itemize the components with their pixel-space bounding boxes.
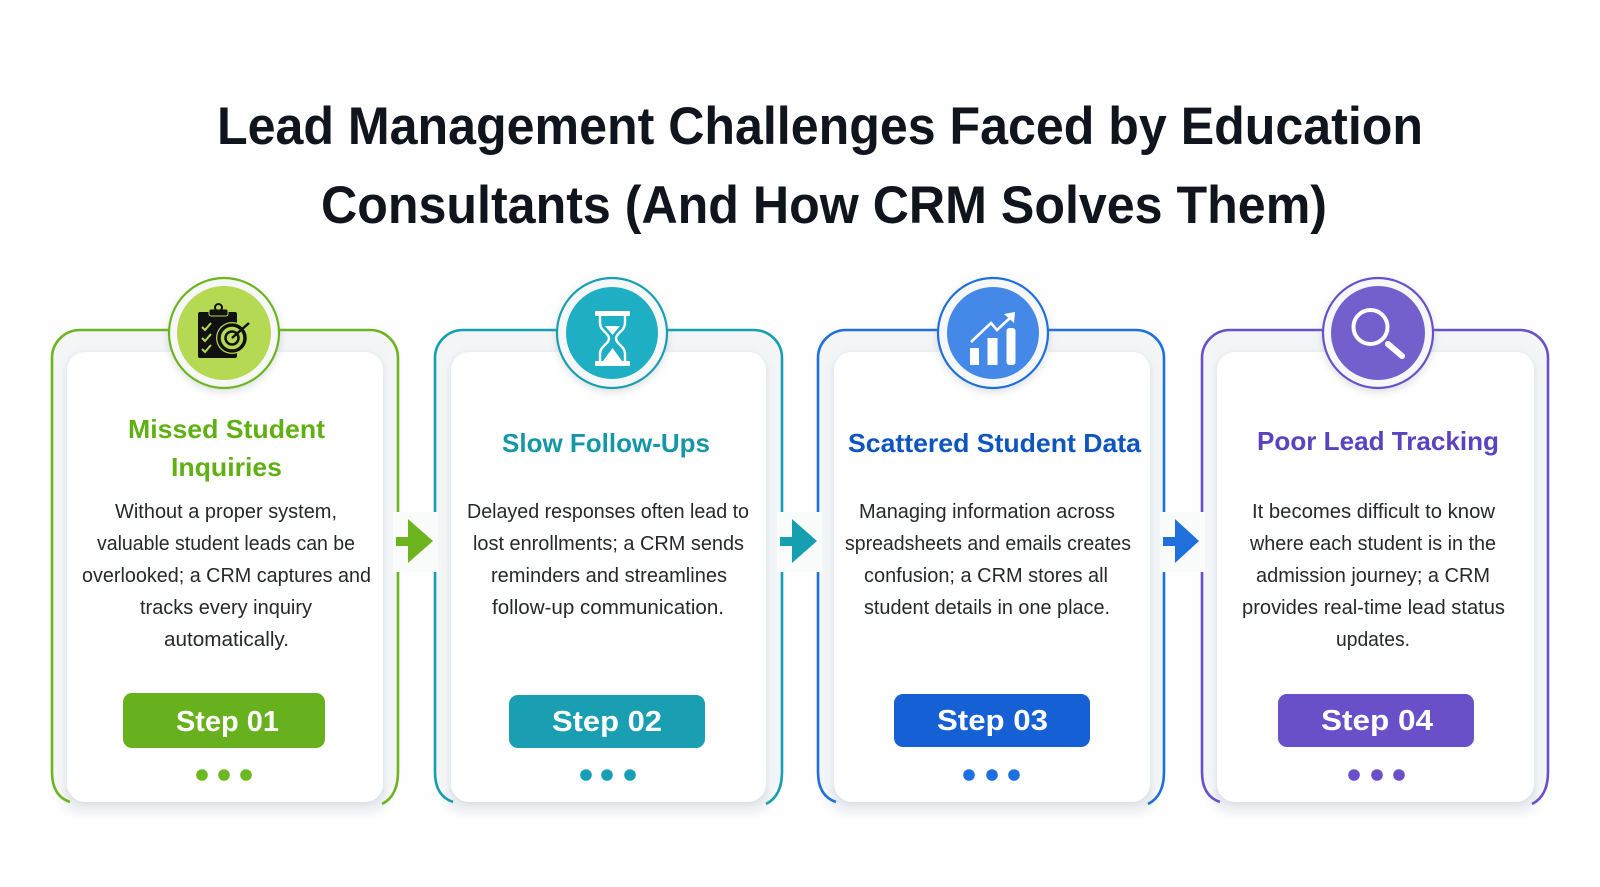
body text: confusion; a CRM stores all bbox=[864, 565, 1108, 587]
body text: overlooked; a CRM captures and bbox=[82, 565, 371, 587]
body text: spreadsheets and emails creates bbox=[845, 533, 1131, 555]
dots bbox=[580, 769, 636, 781]
arrow: step 1 to 2 bbox=[393, 512, 438, 572]
panel: Slow Follow-Ups bbox=[435, 278, 782, 814]
body text bbox=[82, 501, 371, 651]
heading: Scattered Student Data bbox=[848, 428, 1142, 458]
body text: student details in one place. bbox=[864, 597, 1110, 619]
body text: updates. bbox=[1336, 629, 1410, 651]
card border bbox=[1202, 330, 1548, 804]
icon: hourglass bbox=[557, 278, 667, 388]
arrow: step 2 to 3 bbox=[777, 512, 822, 572]
heading bbox=[128, 414, 325, 482]
step badge bbox=[894, 694, 1090, 747]
body text bbox=[1242, 501, 1505, 651]
title: Consultants (And How CRM Solves Them) bbox=[321, 176, 1327, 235]
heading: Slow Follow-Ups bbox=[502, 428, 710, 458]
body text: provides real-time lead status bbox=[1242, 597, 1505, 619]
icon: growth chart bbox=[938, 278, 1048, 388]
body text: where each student is in the bbox=[1249, 533, 1496, 555]
body text: follow-up communication. bbox=[492, 597, 724, 619]
body text bbox=[467, 501, 749, 619]
body text: reminders and streamlines bbox=[491, 565, 727, 587]
step badge bbox=[123, 693, 325, 748]
heading: Missed Student bbox=[128, 414, 325, 444]
heading: Poor Lead Tracking bbox=[1257, 426, 1499, 456]
step badge: Step 04 bbox=[1321, 705, 1433, 737]
step badge bbox=[509, 695, 705, 748]
body text: valuable student leads can be bbox=[97, 533, 355, 555]
step badge: Step 01 bbox=[176, 706, 279, 738]
heading: Inquiries bbox=[171, 452, 282, 482]
body text bbox=[845, 501, 1131, 619]
panel: Missed Student Inquiries bbox=[52, 278, 398, 814]
card border bbox=[435, 330, 782, 804]
title bbox=[217, 97, 1423, 235]
card border bbox=[818, 330, 1164, 804]
step badge: Step 02 bbox=[552, 706, 662, 738]
arrow: step 3 to 4 bbox=[1160, 512, 1205, 572]
dots bbox=[1348, 769, 1405, 781]
body text: tracks every inquiry bbox=[140, 597, 312, 619]
card border bbox=[52, 330, 398, 804]
body text: Without a proper system, bbox=[115, 501, 337, 523]
dots bbox=[963, 769, 1020, 781]
body text: Managing information across bbox=[859, 501, 1115, 523]
dots bbox=[196, 769, 252, 781]
icon: clipboard and target bbox=[169, 278, 279, 388]
step badge: Step 03 bbox=[937, 705, 1048, 737]
body text: lost enrollments; a CRM sends bbox=[473, 533, 744, 555]
body text: It becomes difficult to know bbox=[1252, 501, 1496, 523]
step badge bbox=[1278, 694, 1474, 747]
body text: Delayed responses often lead to bbox=[467, 501, 749, 523]
panel: Poor Lead Tracking bbox=[1202, 278, 1548, 814]
panel: Scattered Student Data bbox=[818, 278, 1164, 814]
body text: admission journey; a CRM bbox=[1256, 565, 1490, 587]
title: Lead Management Challenges Faced by Education bbox=[217, 97, 1423, 156]
body text: automatically. bbox=[164, 629, 289, 651]
icon: magnifying glass bbox=[1323, 278, 1433, 388]
